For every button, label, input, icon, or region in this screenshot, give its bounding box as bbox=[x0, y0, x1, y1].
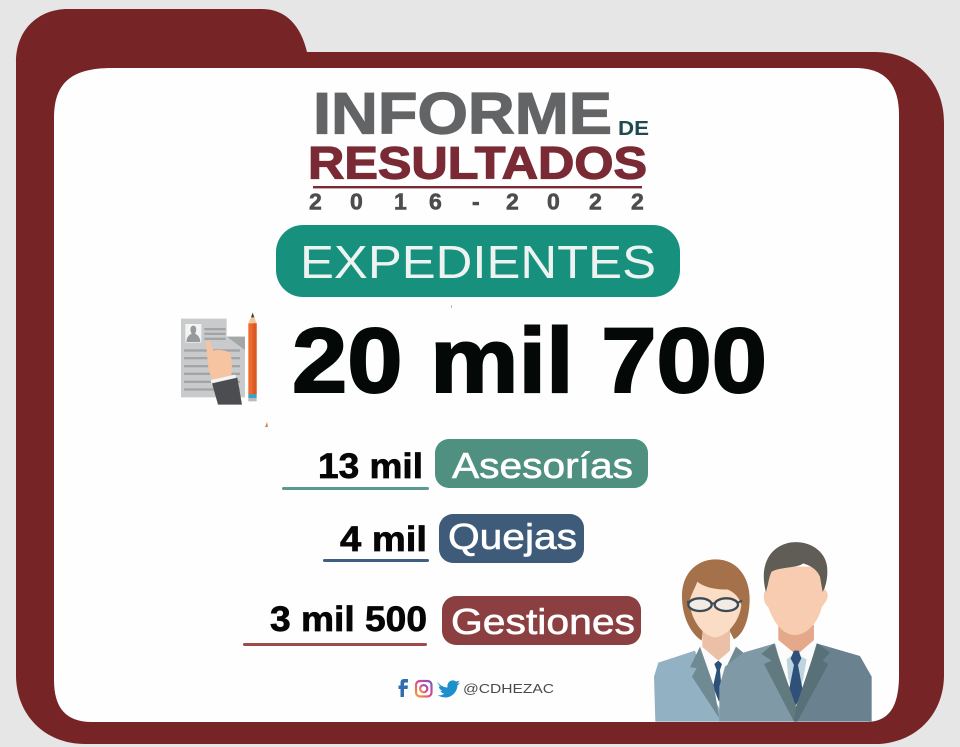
mark: small grey speck bbox=[451, 305, 452, 308]
pill: Asesorías: Asesorías bbox=[452, 445, 633, 486]
value: 4 mil: 4 mil bbox=[340, 520, 427, 559]
row: Asesorías bbox=[282, 439, 648, 490]
value: 13 mil: 13 mil bbox=[318, 447, 423, 486]
pill: Asesorías bbox=[435, 439, 648, 488]
banner: Expedientes bbox=[276, 225, 680, 297]
heading: RESULTADOS: RESULTADOS bbox=[308, 138, 647, 188]
heading: DE: DE bbox=[618, 118, 649, 140]
title: Informe de Resultados bbox=[308, 82, 649, 214]
social media handle bbox=[398, 679, 554, 698]
pill: Quejas bbox=[439, 514, 584, 563]
row: Quejas bbox=[323, 514, 584, 563]
value: 3 mil 500: 3 mil 500 bbox=[270, 600, 427, 639]
pill: Quejas: Quejas bbox=[448, 516, 577, 557]
panel: white content sheet bbox=[54, 68, 899, 722]
row: Gestiones bbox=[243, 596, 641, 646]
icon: facebook bbox=[398, 679, 408, 697]
title underline bbox=[313, 186, 642, 188]
figure: woman bbox=[654, 559, 750, 722]
banner: Expedientes: EXPEDIENTES bbox=[300, 236, 656, 288]
text: @CDHEZAC: @CDHEZAC bbox=[463, 681, 554, 696]
pill: Gestiones: Gestiones bbox=[451, 601, 635, 642]
icon: document, hand and pencil bbox=[181, 313, 257, 405]
icon: pencil bbox=[248, 313, 257, 401]
icon: twitter bbox=[437, 680, 460, 698]
heading: INFORME: INFORME bbox=[313, 82, 612, 146]
total: 20 mil 700: 20 mil 700 bbox=[292, 310, 767, 412]
figure: man bbox=[719, 542, 872, 722]
icon: instagram bbox=[416, 681, 432, 696]
mark: small orange speck bbox=[265, 422, 268, 427]
pill: Gestiones bbox=[442, 596, 641, 645]
illustration: two professionals bbox=[654, 542, 872, 722]
heading: years: 2016-2022 bbox=[309, 188, 644, 214]
